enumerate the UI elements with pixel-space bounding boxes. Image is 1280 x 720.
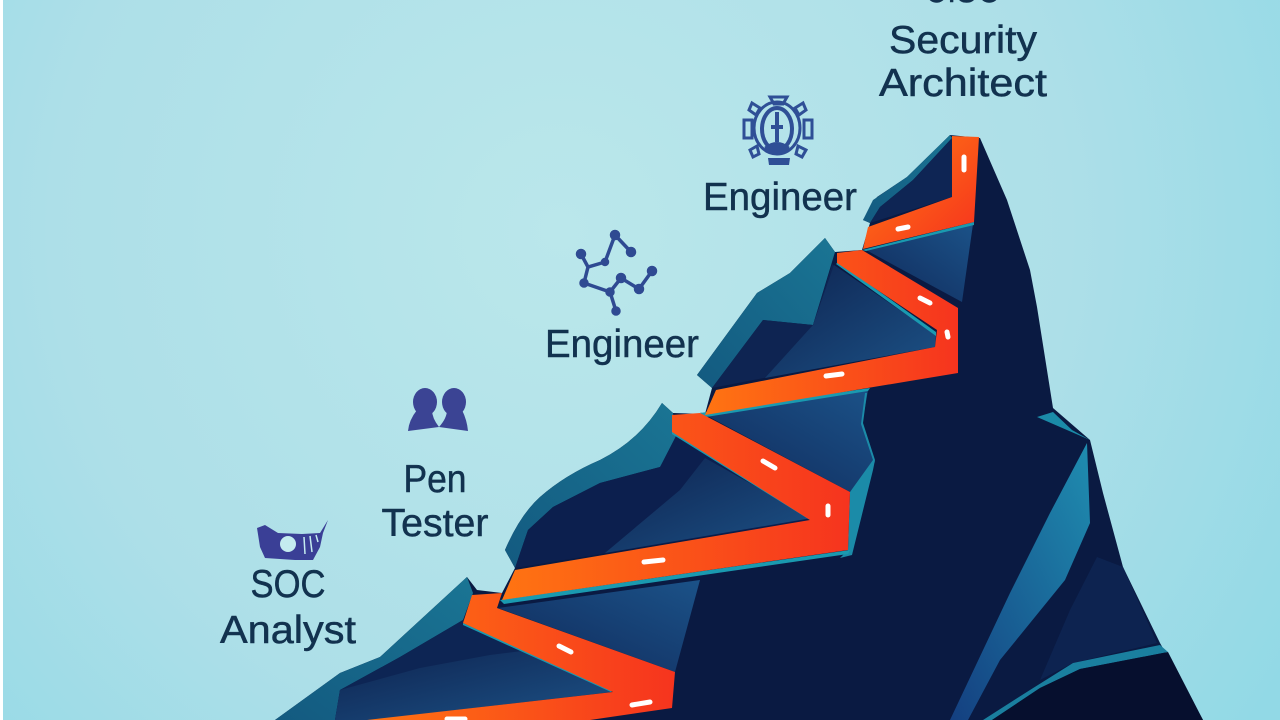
facet: lower ledge xyxy=(335,620,612,720)
road: third segment xyxy=(502,413,850,600)
teal ridge: top slope xyxy=(863,135,952,223)
teal lower ridge line xyxy=(983,645,1168,720)
label: Engineer (lower): Engineer xyxy=(545,323,699,366)
road: second segment xyxy=(705,250,958,415)
facet: below third road xyxy=(498,580,700,672)
label: Security Architect: Security xyxy=(889,19,1038,62)
road: lower segment xyxy=(367,593,675,720)
label: SOC Analyst xyxy=(220,563,356,652)
label: SOC Analyst: Analyst xyxy=(220,609,356,652)
facet: below second road xyxy=(700,390,875,492)
road: top segment xyxy=(863,136,979,249)
dark base corner xyxy=(992,652,1203,720)
facet: lower ledge highlight xyxy=(335,650,612,720)
icon: two people xyxy=(408,388,468,431)
label: Security Architect: Architect xyxy=(879,62,1047,105)
label: Pen Tester xyxy=(382,458,489,545)
label: Security Architect xyxy=(879,19,1047,105)
mountain silhouette xyxy=(275,135,1203,720)
teal ridge: second slope xyxy=(505,403,677,568)
teal edge strips under road xyxy=(463,222,974,692)
facet: second ledge highlight xyxy=(605,458,812,553)
teal strip beside third road xyxy=(840,393,875,558)
label: Pen Tester: Tester xyxy=(382,502,489,545)
white dashes xyxy=(447,157,964,719)
icon: network nodes xyxy=(578,232,656,314)
teal ridge: third slope xyxy=(697,238,835,388)
label: SOC Analyst: SOC xyxy=(250,563,326,606)
label: Pen Tester: Pen xyxy=(404,458,466,501)
facet: second ledge xyxy=(515,434,810,568)
facet: below top road xyxy=(866,224,973,302)
facet: third ledge highlight xyxy=(765,265,936,378)
facet: third ledge xyxy=(712,264,935,388)
teal notch xyxy=(1037,412,1090,440)
label: Engineer (upper): Engineer xyxy=(703,176,857,219)
icon: SOC badge xyxy=(257,520,328,560)
mountain xyxy=(275,135,1203,720)
orange climbing path xyxy=(367,136,979,720)
teal ridge: lower slope xyxy=(275,577,473,720)
icon: gear with figure xyxy=(744,97,812,165)
blue blade facet xyxy=(950,443,1090,720)
facet: top ledge xyxy=(870,138,952,223)
dark inner slope xyxy=(1040,557,1157,680)
